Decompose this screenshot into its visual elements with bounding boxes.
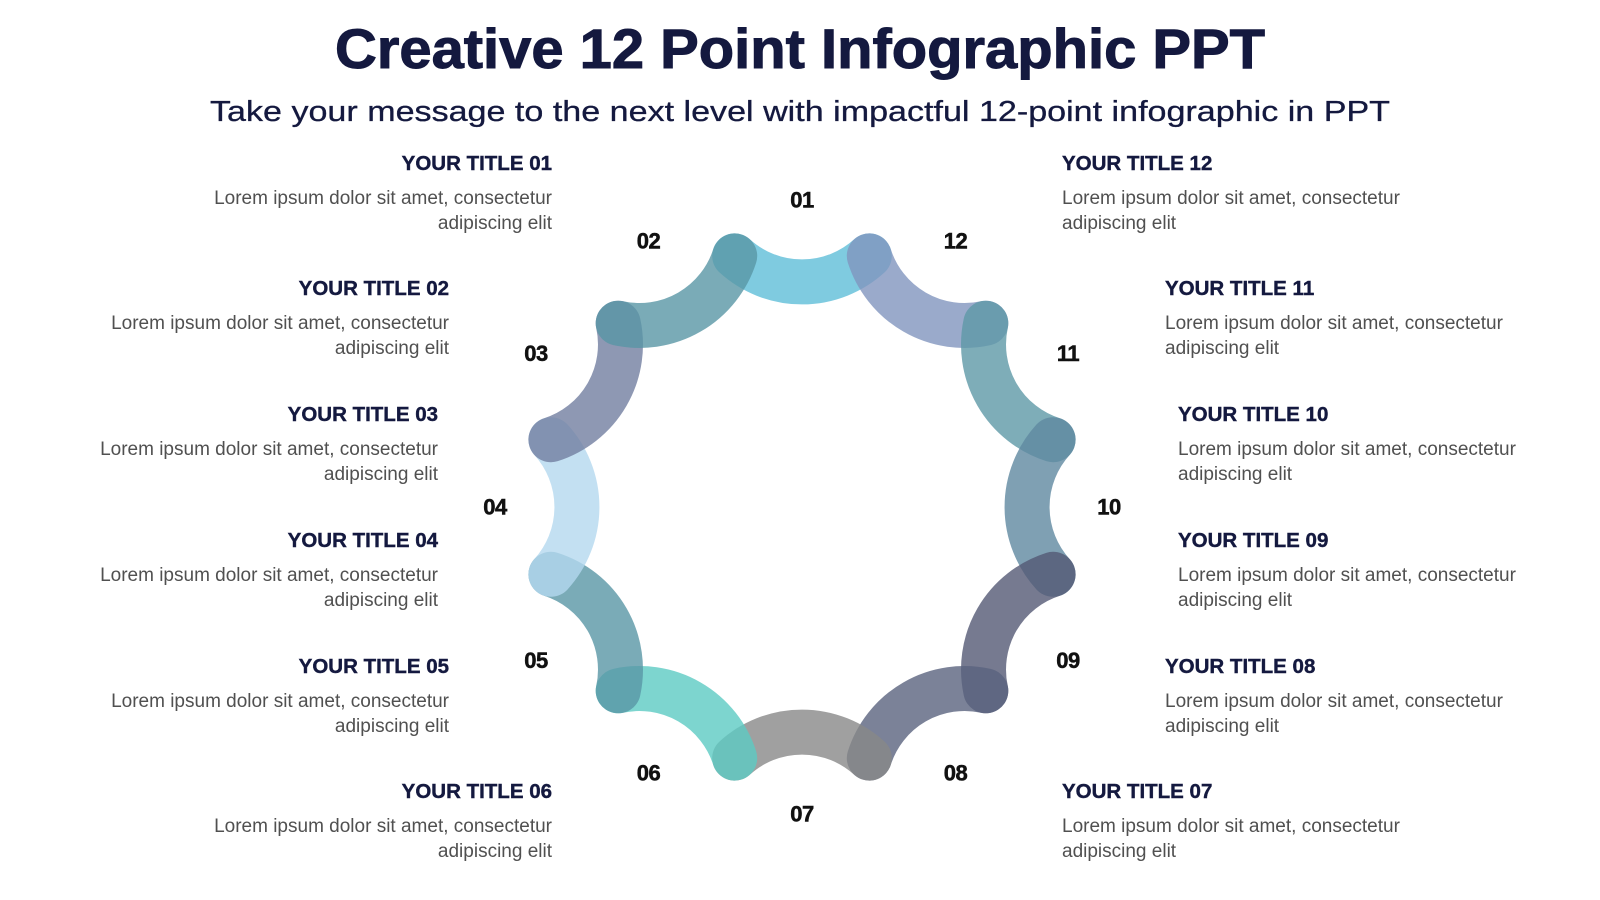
text block 10: YOUR TITLE 10 xyxy=(1178,403,1328,426)
text block 02: YOUR TITLE 02 xyxy=(299,277,449,300)
text block 03: YOUR TITLE 03 xyxy=(288,403,438,426)
number labels: 03 xyxy=(524,341,548,366)
text block 04 xyxy=(100,529,439,611)
text block 08: YOUR TITLE 08 xyxy=(1165,655,1315,678)
arc 03 xyxy=(551,323,620,440)
text block 12: Lorem ipsum dolor sit amet, consectetur xyxy=(1062,188,1401,209)
arc 11 xyxy=(984,323,1053,440)
text block 06: adipiscing elit xyxy=(438,841,553,862)
text block 08: Lorem ipsum dolor sit amet, consectetur xyxy=(1165,691,1504,712)
text block 08 xyxy=(1165,655,1504,737)
text block 12: YOUR TITLE 12 xyxy=(1062,152,1212,175)
arc 09 xyxy=(984,574,1053,691)
text block 06: YOUR TITLE 06 xyxy=(402,780,552,803)
arc 04 xyxy=(551,440,577,574)
ring diagram xyxy=(551,256,1053,758)
title: Creative 12 Point Infographic PPT xyxy=(335,17,1265,80)
text block 12: adipiscing elit xyxy=(1062,213,1177,234)
number labels: 08 xyxy=(944,760,967,786)
number labels: 12 xyxy=(944,228,967,254)
number labels: 09 xyxy=(1056,648,1080,673)
text block 09 xyxy=(1178,529,1517,611)
arc 02 xyxy=(618,256,735,325)
text block 04: YOUR TITLE 04 xyxy=(288,529,439,552)
arc 10 xyxy=(1027,440,1053,574)
number labels: 07 xyxy=(790,802,814,826)
text block 04: Lorem ipsum dolor sit amet, consectetur xyxy=(100,565,439,586)
text block 01: YOUR TITLE 01 xyxy=(402,152,552,175)
text block 05 xyxy=(111,655,450,737)
arc 08 xyxy=(869,689,986,758)
text block 09: Lorem ipsum dolor sit amet, consectetur xyxy=(1178,565,1517,586)
number labels: 01 xyxy=(790,188,814,212)
text block 05: Lorem ipsum dolor sit amet, consectetur xyxy=(111,691,450,712)
number labels: 05 xyxy=(524,648,548,673)
arc 01 xyxy=(735,256,869,282)
number labels: 02 xyxy=(637,228,660,254)
text block 10: Lorem ipsum dolor sit amet, consectetur xyxy=(1178,439,1517,460)
text block 01: Lorem ipsum dolor sit amet, consectetur xyxy=(214,188,553,209)
text block 10: adipiscing elit xyxy=(1178,464,1293,485)
arc 07 xyxy=(735,732,869,758)
number labels: 11 xyxy=(1057,341,1079,366)
text block 11 xyxy=(1165,277,1504,359)
subtitle: Take your message to the next level with impactful 12-point infographic in PPT xyxy=(210,96,1390,128)
text block 02 xyxy=(111,277,450,359)
text block 08: adipiscing elit xyxy=(1165,716,1280,737)
arc 06 xyxy=(618,689,735,758)
text block 11: Lorem ipsum dolor sit amet, consectetur xyxy=(1165,313,1504,334)
number labels xyxy=(483,188,1121,826)
text block 11: YOUR TITLE 11 xyxy=(1165,277,1314,300)
arc 05 xyxy=(551,574,620,691)
text block 12 xyxy=(1062,152,1401,234)
number labels: 04 xyxy=(483,494,508,520)
number labels: 10 xyxy=(1097,494,1121,520)
text block 07: adipiscing elit xyxy=(1062,841,1177,862)
text block 03 xyxy=(100,403,439,485)
text block 10 xyxy=(1178,403,1517,485)
text block 01: adipiscing elit xyxy=(438,213,553,234)
text block 03: Lorem ipsum dolor sit amet, consectetur xyxy=(100,439,439,460)
text block 06 xyxy=(214,780,553,862)
text block 01 xyxy=(214,152,553,234)
text block 02: adipiscing elit xyxy=(335,338,450,359)
text block 09: adipiscing elit xyxy=(1178,590,1293,611)
text block 11: adipiscing elit xyxy=(1165,338,1280,359)
text block 06: Lorem ipsum dolor sit amet, consectetur xyxy=(214,816,553,837)
text block 07: YOUR TITLE 07 xyxy=(1062,780,1212,803)
number labels: 06 xyxy=(637,760,660,786)
arc 12 xyxy=(869,256,986,325)
text block 03: adipiscing elit xyxy=(324,464,439,485)
text block 07 xyxy=(1062,780,1401,862)
text block 05: adipiscing elit xyxy=(335,716,450,737)
text block 02: Lorem ipsum dolor sit amet, consectetur xyxy=(111,313,450,334)
text block 04: adipiscing elit xyxy=(324,590,439,611)
text block 05: YOUR TITLE 05 xyxy=(299,655,449,678)
text block 07: Lorem ipsum dolor sit amet, consectetur xyxy=(1062,816,1401,837)
text block 09: YOUR TITLE 09 xyxy=(1178,529,1328,552)
